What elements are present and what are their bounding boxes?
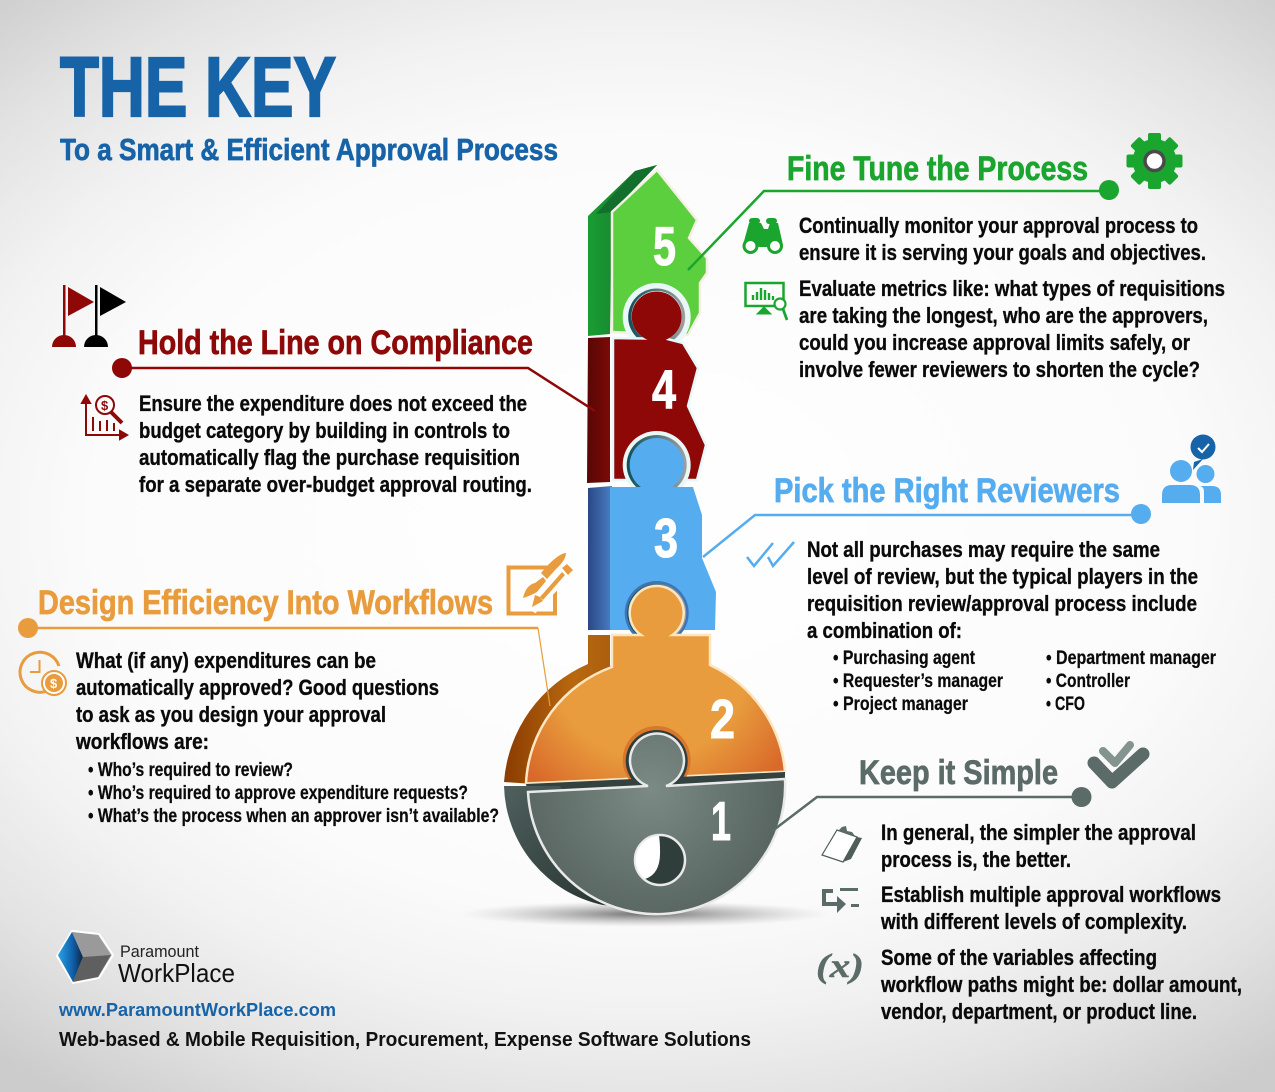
subtitle: To a Smart & Efficient Approval Process <box>60 132 558 167</box>
list: reviewers right: • Controller <box>1046 671 1130 692</box>
text block: a combination of: <box>807 618 962 643</box>
text block: level of review, but the typical players in the <box>807 564 1198 589</box>
text block: ensure it is serving your goals and objectives. <box>799 240 1206 265</box>
text block: for a separate over-budget approval routing. <box>139 472 532 497</box>
text block <box>880 945 1242 1024</box>
text block <box>807 537 1198 643</box>
key piece 1: gray <box>504 734 785 914</box>
icon: budget chart: $ <box>101 398 109 413</box>
list: reviewers left: • Requester’s manager <box>833 671 1003 692</box>
panel: keep it simple <box>771 745 1242 1024</box>
text block: process is, the better. <box>881 847 1071 872</box>
keyhole <box>635 835 685 885</box>
icon: clock and coin <box>20 652 66 695</box>
text block <box>799 276 1225 382</box>
list: reviewers left <box>833 648 1003 715</box>
number 1: 1 <box>711 790 731 852</box>
key piece 5: green <box>588 165 707 351</box>
heading: Keep it Simple <box>859 754 1058 792</box>
panel: hold the line on compliance <box>52 285 595 497</box>
footer: logo and company info <box>57 931 751 1051</box>
panel: pick the right reviewers <box>703 434 1221 715</box>
title: THE KEY <box>60 40 336 134</box>
icon: variable x: (x) <box>816 948 864 985</box>
key shadow <box>460 901 830 927</box>
text block: automatically flag the purchase requisition <box>139 445 520 470</box>
text block: are taking the longest, who are the approvers, <box>799 303 1208 328</box>
connector: blue <box>703 504 1151 557</box>
text block: In general, the simpler the approval <box>881 820 1196 845</box>
text block: Continually monitor your approval process to <box>799 213 1198 238</box>
text block: Not all purchases may require the same <box>807 537 1160 562</box>
text block <box>799 213 1206 265</box>
logo: wordmark: WorkPlace <box>118 958 235 988</box>
text block: involve fewer reviewers to shorten the cycle? <box>799 357 1200 382</box>
key piece 4: red <box>587 292 706 499</box>
heading: Pick the Right Reviewers <box>774 472 1120 510</box>
list: workflow questions: • What’s the process when an approver isn’t available? <box>88 806 499 827</box>
icon: gear <box>1126 133 1182 189</box>
logo: cube <box>57 931 113 983</box>
list: reviewers left: • Purchasing agent <box>833 648 976 669</box>
icon: reviewers <box>1162 434 1221 503</box>
connector: orange <box>18 618 550 706</box>
text block <box>139 391 532 497</box>
text block <box>881 820 1196 872</box>
icon: design tools <box>508 553 575 614</box>
heading: Hold the Line on Compliance <box>138 324 533 362</box>
icon: binoculars <box>743 218 783 252</box>
text block: What (if any) expenditures can be <box>76 648 376 673</box>
number 4: 4 <box>652 358 676 420</box>
text block <box>880 882 1221 934</box>
text block: vendor, department, or product line. <box>881 999 1197 1024</box>
text block: with different levels of complexity. <box>880 909 1187 934</box>
list: workflow questions: • Who’s required to approve expenditure requests? <box>88 783 468 804</box>
number 2: 2 <box>710 688 735 750</box>
text block: workflows are: <box>75 729 209 754</box>
panel: fine tune the process <box>688 133 1225 382</box>
list: reviewers right: • Department manager <box>1046 648 1216 669</box>
number 3: 3 <box>654 507 678 569</box>
list: reviewers left: • Project manager <box>833 694 969 715</box>
text block: to ask as you design your approval <box>76 702 386 727</box>
icon: double check <box>1094 745 1143 782</box>
icon: workflow arrow <box>822 888 859 913</box>
icon: monitor with magnifier <box>746 283 787 320</box>
text block: requisition review/approval process include <box>807 591 1197 616</box>
list: reviewers right <box>1046 648 1216 715</box>
icon: check marks <box>747 542 794 566</box>
key piece 2: orange <box>504 586 785 794</box>
panel: design efficiency into workflows <box>18 553 575 827</box>
text block: Some of the variables affecting <box>881 945 1157 970</box>
key piece 3: blue <box>588 438 716 645</box>
heading: Design Efficiency Into Workflows <box>38 584 493 622</box>
text block: Ensure the expenditure does not exceed the <box>139 391 527 416</box>
text block: automatically approved? Good questions <box>76 675 439 700</box>
text block: budget category by building in controls to <box>139 418 510 443</box>
tagline: Web-based & Mobile Requisition, Procurement, Expense Software Solutions <box>59 1029 751 1051</box>
list: workflow questions: • Who’s required to review? <box>88 760 293 781</box>
key illustration <box>460 165 830 927</box>
logo: wordmark: Paramount <box>120 942 199 961</box>
website: www.ParamountWorkPlace.com <box>58 1000 336 1020</box>
text block: Establish multiple approval workflows <box>881 882 1221 907</box>
icon: flags <box>52 285 126 347</box>
text block <box>75 648 439 754</box>
number 5: 5 <box>653 215 676 277</box>
list: workflow questions <box>88 760 499 827</box>
connector: red <box>112 358 595 411</box>
icon: budget chart <box>82 396 127 439</box>
heading: Fine Tune the Process <box>787 150 1088 188</box>
connector: gray <box>771 787 1092 832</box>
logo: wordmark <box>118 942 235 988</box>
icon: clipboard <box>822 826 862 862</box>
text block: could you increase approval limits safely, or <box>799 330 1190 355</box>
connector: green <box>688 180 1119 270</box>
icon: clock and coin: $ <box>50 676 58 691</box>
list: reviewers right: • CFO <box>1046 694 1085 715</box>
